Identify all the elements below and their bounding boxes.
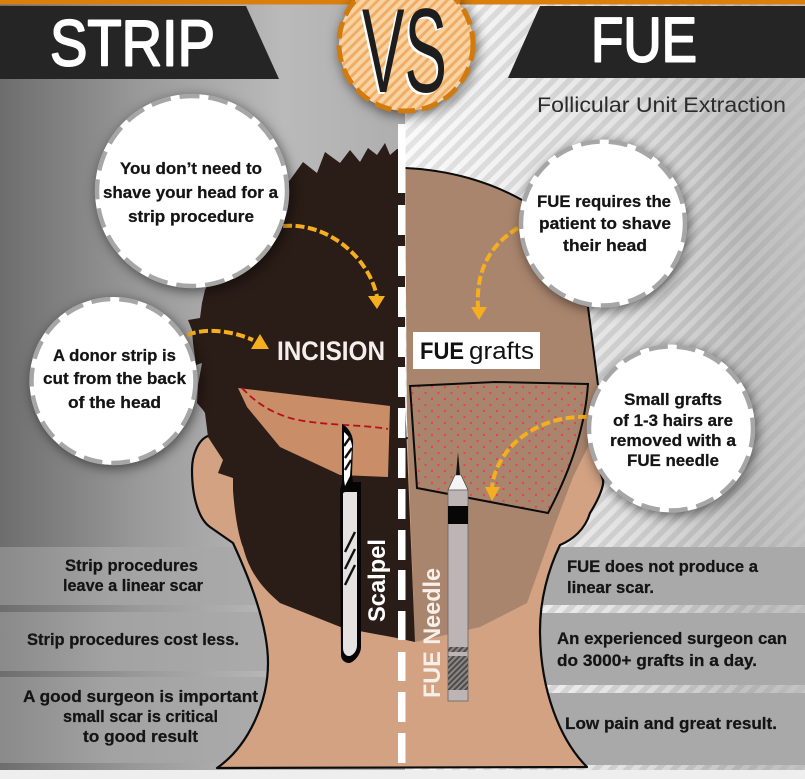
- callout: small grafts: [587, 344, 755, 512]
- heading: strip: [0, 6, 279, 80]
- skin: neck and ears: [192, 436, 603, 768]
- callout: fue requires shaving: [519, 140, 687, 308]
- hair: left half of the head: [188, 143, 415, 642]
- scalpel label: Scalpel: [364, 539, 391, 622]
- badge: vs: [339, 0, 473, 120]
- text: left strip facts: A good surgeon is important: [23, 687, 258, 706]
- arrow: shave to incision: [283, 226, 385, 309]
- callout: donor strip: A donor strip is: [53, 346, 176, 365]
- text: right fue facts: An experienced surgeon can: [557, 629, 787, 648]
- arrow: needle to graft area: [485, 417, 587, 501]
- callout: no shaving for strip: shave your head for a: [103, 183, 279, 202]
- panel: left fact bands: [0, 547, 270, 763]
- shaved head outline: [405, 168, 598, 385]
- icon: fue needle: [448, 452, 468, 701]
- icon: scalpel: [340, 424, 361, 663]
- callout: no shaving for strip: [95, 94, 289, 288]
- heading: strip: STRIP: [50, 6, 215, 80]
- callout: no shaving for strip: strip procedure: [128, 207, 254, 226]
- heading: fue: FUE: [591, 6, 697, 76]
- arrow: fue shave to grafts: [471, 228, 518, 320]
- strip incision area: [238, 388, 390, 477]
- callout: donor strip: of the head: [68, 393, 161, 412]
- callout: fue requires shaving: patient to shave: [539, 214, 671, 233]
- arrow: donor strip to incision: [187, 331, 269, 349]
- text: left strip facts: Strip procedures: [65, 556, 198, 575]
- fue grafts label: FUE: [420, 338, 464, 365]
- text: right fue facts: [557, 557, 787, 733]
- callout: small grafts: of 1-3 hairs are: [613, 411, 733, 430]
- text: right fue facts: FUE does not produce a: [567, 557, 759, 576]
- fue grafts label: grafts: [469, 338, 534, 365]
- callout: fue requires shaving: their head: [563, 236, 647, 255]
- callout: donor strip: cut from the back: [43, 369, 187, 388]
- shaved right half of the head: [405, 168, 598, 642]
- text: left strip facts: leave a linear scar: [63, 576, 203, 595]
- callout: no shaving for strip: You don’t need to: [120, 159, 262, 178]
- text: right fue facts: do 3000+ grafts in a day.: [557, 651, 757, 670]
- callout: fue requires shaving: FUE requires the: [537, 192, 671, 211]
- incision dashed line: [242, 388, 388, 429]
- bottom strip: [0, 770, 805, 779]
- fue graft zone: [410, 382, 588, 513]
- top orange bar: [0, 0, 805, 4]
- text: left strip facts: small scar is critical: [63, 707, 218, 726]
- text: right fue facts: linear scar.: [567, 578, 654, 597]
- fue grafts label: [413, 332, 540, 369]
- background: right striped panel: [405, 0, 805, 770]
- incision label: INCISION: [277, 336, 385, 366]
- subtitle: follicular unit extraction: Follicular Unit Extraction: [537, 94, 786, 117]
- heading: fue: [508, 6, 805, 78]
- callout: small grafts: removed with a: [610, 431, 737, 450]
- panel: right fact bands: [535, 547, 805, 765]
- fue needle label: FUE Needle: [419, 568, 446, 698]
- center dashed divider: [398, 124, 406, 763]
- head illustration: [188, 143, 603, 768]
- text: left strip facts: to good result: [83, 727, 198, 746]
- callout: donor strip: [30, 297, 198, 465]
- text: left strip facts: Strip procedures cost less.: [27, 630, 239, 649]
- text: right fue facts: Low pain and great result.: [565, 714, 777, 733]
- text: left strip facts: [23, 556, 258, 746]
- callout: small grafts: Small grafts: [624, 390, 722, 409]
- background: left gradient panel: [0, 0, 405, 770]
- callout: small grafts: FUE needle: [627, 451, 719, 470]
